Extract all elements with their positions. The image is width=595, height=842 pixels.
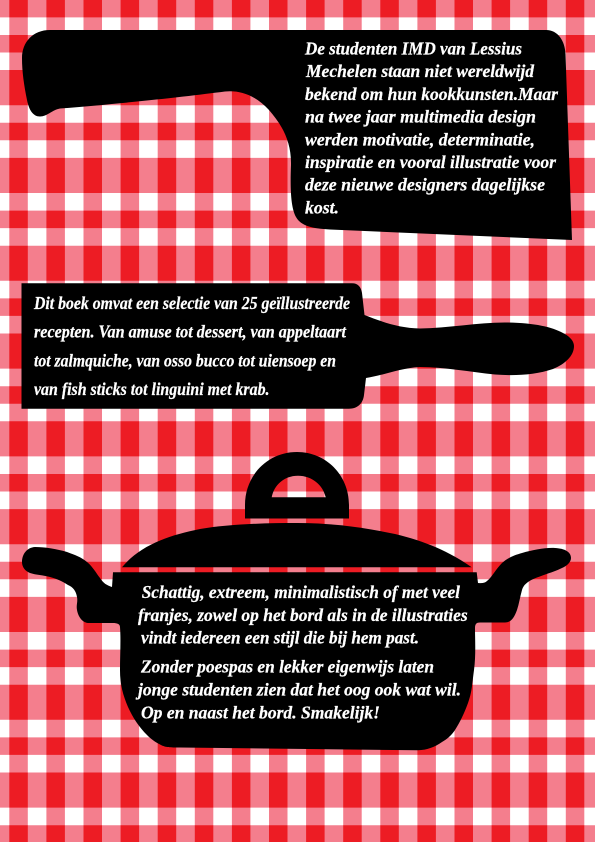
text: intro paragraph: inspiratie en vooral illustratie voor — [305, 152, 557, 172]
icon: spatula silhouette — [22, 283, 574, 409]
text: closing paragraphs: franjes, zowel op het bord als in de illustraties — [138, 605, 468, 625]
text: intro paragraph: werden motivatie, determinatie, — [305, 129, 535, 149]
panel: knife with intro text — [22, 30, 572, 240]
text: book description: recepten. Van amuse tot dessert, van appeltaart — [34, 322, 347, 342]
text: closing paragraphs: Zonder poespas en lekker eigenwijs laten — [140, 656, 434, 676]
text: closing paragraphs: jonge studenten zien dat het oog ook wat wil. — [135, 680, 461, 700]
text: intro paragraph: na twee jaar multimedia design — [305, 107, 536, 127]
text: intro paragraph: bekend om hun kookkunsten.Maar — [305, 84, 559, 104]
icon: knife silhouette — [22, 30, 572, 240]
text: book description: van fish sticks tot linguini met krab. — [34, 379, 270, 399]
text: closing paragraphs — [135, 582, 468, 722]
text: intro paragraph: deze nieuwe designers dagelijkse — [305, 175, 545, 195]
text: closing paragraphs: Schattig, extreem, minimalistisch of met veel — [142, 582, 460, 602]
text: intro paragraph: kost. — [305, 197, 339, 217]
icon: pot lid — [122, 523, 472, 567]
panel: cooking pot with closing text — [22, 452, 571, 750]
text: intro paragraph: De studenten IMD van Lessius — [304, 38, 522, 58]
text: closing paragraphs: vindt iedereen een stijl die bij hem past. — [141, 628, 419, 648]
text: intro paragraph — [304, 38, 559, 217]
text: intro paragraph: Mechelen staan niet wereldwijd — [305, 61, 535, 81]
icon: pot lid knob — [245, 452, 349, 518]
text: book description — [33, 293, 350, 399]
text: closing paragraphs: Op en naast het bord. Smakelijk! — [141, 702, 380, 722]
text: book description: tot zalmquiche, van osso bucco tot uiensoep en — [34, 351, 336, 371]
text: book description: Dit boek omvat een selectie van 25 geïllustreerde — [33, 293, 350, 313]
panel: spatula with book description — [22, 283, 574, 409]
icon: pot body with handles — [22, 547, 571, 750]
